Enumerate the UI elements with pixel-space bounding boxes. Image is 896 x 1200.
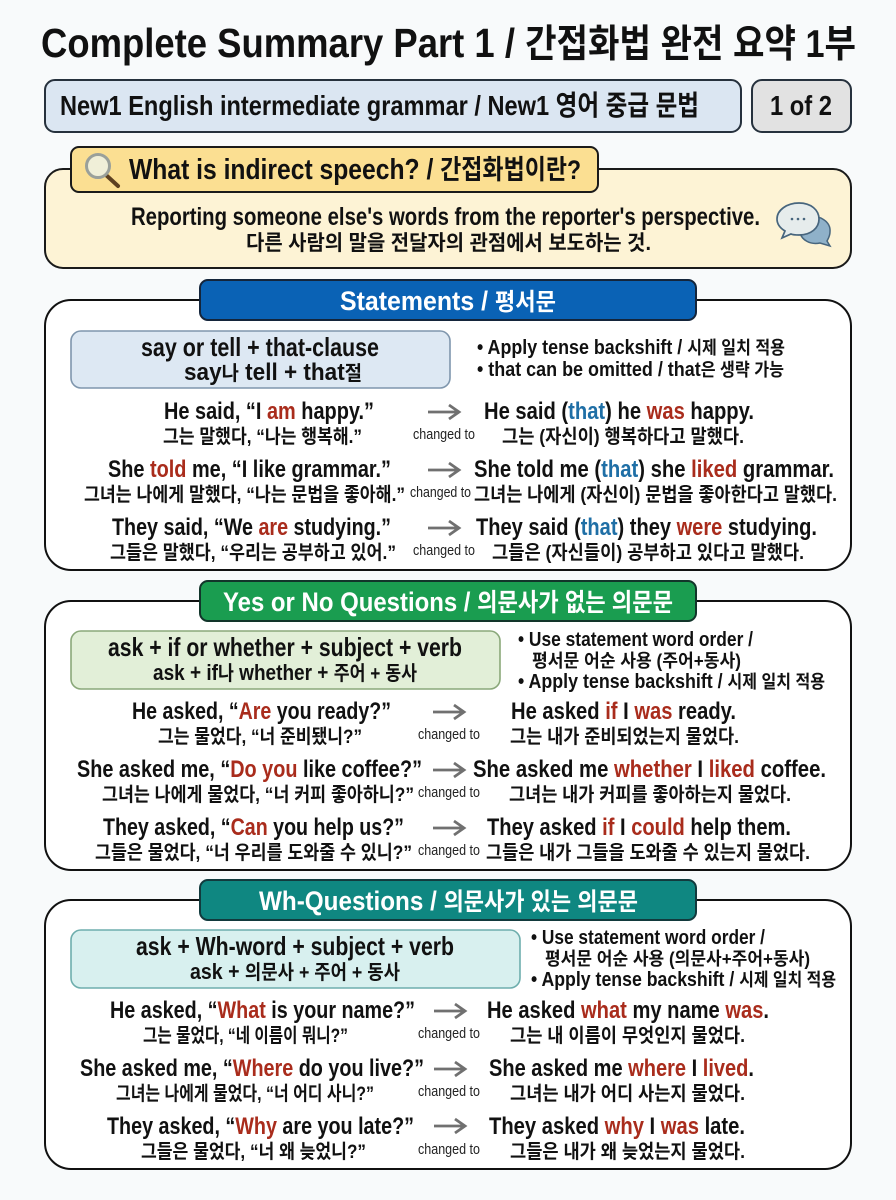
section heading: wh-questions (200, 880, 696, 920)
example row 1: changed to (413, 427, 475, 443)
example row 1: 그는 (자신이) 행복하다고 말했다. (502, 426, 744, 448)
example row 2: changed to (418, 1084, 480, 1100)
rule box: ask + if나 whether + 주어 + 동사 (153, 660, 417, 685)
example row 3: changed to (413, 543, 475, 559)
course banner (45, 80, 741, 132)
section heading: statements (200, 280, 696, 320)
example row 3: 그들은 물었다, “너 왜 늦었니?” (141, 1141, 366, 1163)
panel: statements (45, 280, 851, 570)
example row 3: 그들은 (자신들이) 공부하고 있다고 말했다. (492, 542, 804, 564)
example row 1: He asked, “What is your name?” (110, 997, 415, 1024)
rule notes: • Apply tense backshift / 시제 일치 적용 (531, 969, 836, 991)
example row 1: He asked, “Are you ready?” (132, 698, 391, 725)
example row 3 (110, 514, 817, 564)
section heading: statements: Statements / 평서문 (340, 286, 556, 316)
example row 3 (95, 814, 810, 864)
example row 1 (163, 398, 754, 448)
example row 3 (107, 1113, 745, 1163)
example row 2: changed to (418, 785, 480, 801)
panel: wh-questions (45, 880, 851, 1169)
section heading: yes or no questions: Yes or No Questions / 의문사가 없는 의문문 (223, 587, 673, 617)
example row 3: 그들은 말했다, “우리는 공부하고 있어.” (110, 542, 396, 564)
rule box: ask + Wh-word + subject + verb (136, 931, 454, 961)
rule box (71, 631, 500, 689)
rule notes: • Apply tense backshift / 시제 일치 적용 (518, 671, 825, 693)
example row 3: They said (that) they were studying. (476, 514, 817, 541)
example row 3: changed to (418, 843, 480, 859)
rule box (71, 930, 520, 988)
panel: yes or no questions (45, 581, 851, 870)
example row 1 (132, 698, 739, 748)
example row 1: changed to (418, 1026, 480, 1042)
rule notes: • Use statement word order / (518, 629, 753, 651)
example row 3: 그들은 내가 그들을 도와줄 수 있는지 물었다. (486, 842, 810, 864)
rule box: say or tell + that-clause (141, 332, 379, 362)
example row 2 (80, 1055, 754, 1105)
rule notes (518, 629, 825, 693)
course banner: New1 English intermediate grammar / New1 영어 중급 문법 (60, 90, 699, 121)
icon: magnifying glass (86, 154, 118, 186)
example row 3: They asked why I was late. (489, 1113, 745, 1140)
rule box: ask + 의문사 + 주어 + 동사 (190, 959, 400, 984)
definition text (131, 203, 760, 255)
example row 3: They asked if I could help them. (487, 814, 791, 841)
example row 2: She asked me where I lived. (489, 1055, 754, 1082)
example row 2: She told me (that) she liked grammar. (474, 456, 834, 483)
rule box: say나 tell + that절 (184, 359, 362, 386)
example row 3: 그들은 물었다, “너 우리를 도와줄 수 있니?” (95, 842, 412, 864)
example row 1: 그는 내가 준비되었는지 물었다. (510, 726, 739, 748)
example row 2: She asked me whether I liked coffee. (473, 756, 826, 783)
rule notes: 평서문 어순 사용 (의문사+주어+동사) (545, 949, 810, 969)
example row 1: He said (that) he was happy. (484, 398, 754, 425)
example row 1: 그는 물었다, “너 준비됐니?” (158, 726, 362, 748)
example row 2: 그녀는 나에게 말했다, “나는 문법을 좋아해.” (84, 484, 405, 506)
example row 2: changed to (410, 485, 471, 501)
example row 3: 그들은 내가 왜 늦었는지 물었다. (510, 1141, 745, 1163)
rule notes (531, 927, 836, 991)
example row 3: They said, “We are studying.” (112, 514, 391, 541)
definition text: 다른 사람의 말을 전달자의 관점에서 보도하는 것. (246, 232, 651, 255)
rule box (71, 331, 450, 388)
example row 2: 그녀는 나에게 물었다, “너 어디 사니?” (116, 1083, 374, 1105)
heading tab: What is indirect speech? / 간접화법이란? (129, 154, 581, 186)
example row 1: 그는 내 이름이 무엇인지 물었다. (510, 1025, 745, 1047)
page badge: 1 of 2 (770, 90, 832, 121)
section heading: wh-questions: Wh-Questions / 의문사가 있는 의문문 (259, 886, 638, 916)
example row 3: changed to (418, 1142, 480, 1158)
example row 1: 그는 말했다, “나는 행복해.” (163, 426, 362, 448)
rule notes: • that can be omitted / that은 생략 가능 (477, 359, 784, 381)
example row 2: She asked me, “Do you like coffee?” (77, 756, 422, 783)
example row 2: 그녀는 나에게 물었다, “너 커피 좋아하니?” (102, 784, 414, 806)
definition text: Reporting someone else's words from the reporter's perspective. (131, 203, 760, 231)
example row 1: changed to (418, 727, 480, 743)
example row 1: He asked if I was ready. (511, 698, 736, 725)
panel: what is indirect speech (45, 147, 851, 268)
example row 1: He said, “I am happy.” (164, 398, 374, 425)
example row 3: They asked, “Why are you late?” (107, 1113, 414, 1140)
page badge (752, 80, 851, 132)
rule notes: 평서문 어순 사용 (주어+동사) (532, 651, 741, 671)
example row 2 (84, 456, 837, 506)
example row 1 (110, 997, 769, 1047)
example row 1: 그는 물었다, “네 이름이 뭐니?” (143, 1025, 348, 1047)
rule notes (477, 337, 785, 381)
example row 2 (77, 756, 826, 806)
example row 2: She asked me, “Where do you live?” (80, 1055, 424, 1082)
rule notes: • Apply tense backshift / 시제 일치 적용 (477, 337, 785, 359)
rule notes: • Use statement word order / (531, 927, 765, 949)
example row 1: He asked what my name was. (487, 997, 769, 1024)
example row 2: 그녀는 내가 커피를 좋아하는지 물었다. (509, 784, 791, 806)
title: Complete Summary Part 1 / 간접화법 완전 요약 1부 (41, 20, 856, 66)
icon: speech bubbles (777, 203, 830, 246)
example row 2: 그녀는 내가 어디 사는지 물었다. (510, 1083, 745, 1105)
example row 2: She told me, “I like grammar.” (108, 456, 391, 483)
rule box: ask + if or whether + subject + verb (108, 632, 462, 662)
example row 3: They asked, “Can you help us?” (103, 814, 404, 841)
example row 2: 그녀는 나에게 (자신이) 문법을 좋아한다고 말했다. (474, 484, 837, 506)
heading tab (71, 147, 598, 192)
